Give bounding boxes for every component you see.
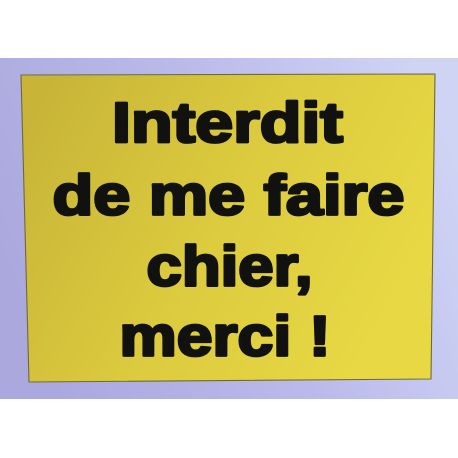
line: de me faire: de me faire <box>52 164 404 228</box>
line: chier,: chier, <box>146 234 312 298</box>
sign text <box>52 91 404 368</box>
lilac background band <box>0 58 458 399</box>
yellow sign panel <box>21 74 435 382</box>
line: Interdit: Interdit <box>112 91 343 155</box>
line: merci !: merci ! <box>120 304 330 368</box>
